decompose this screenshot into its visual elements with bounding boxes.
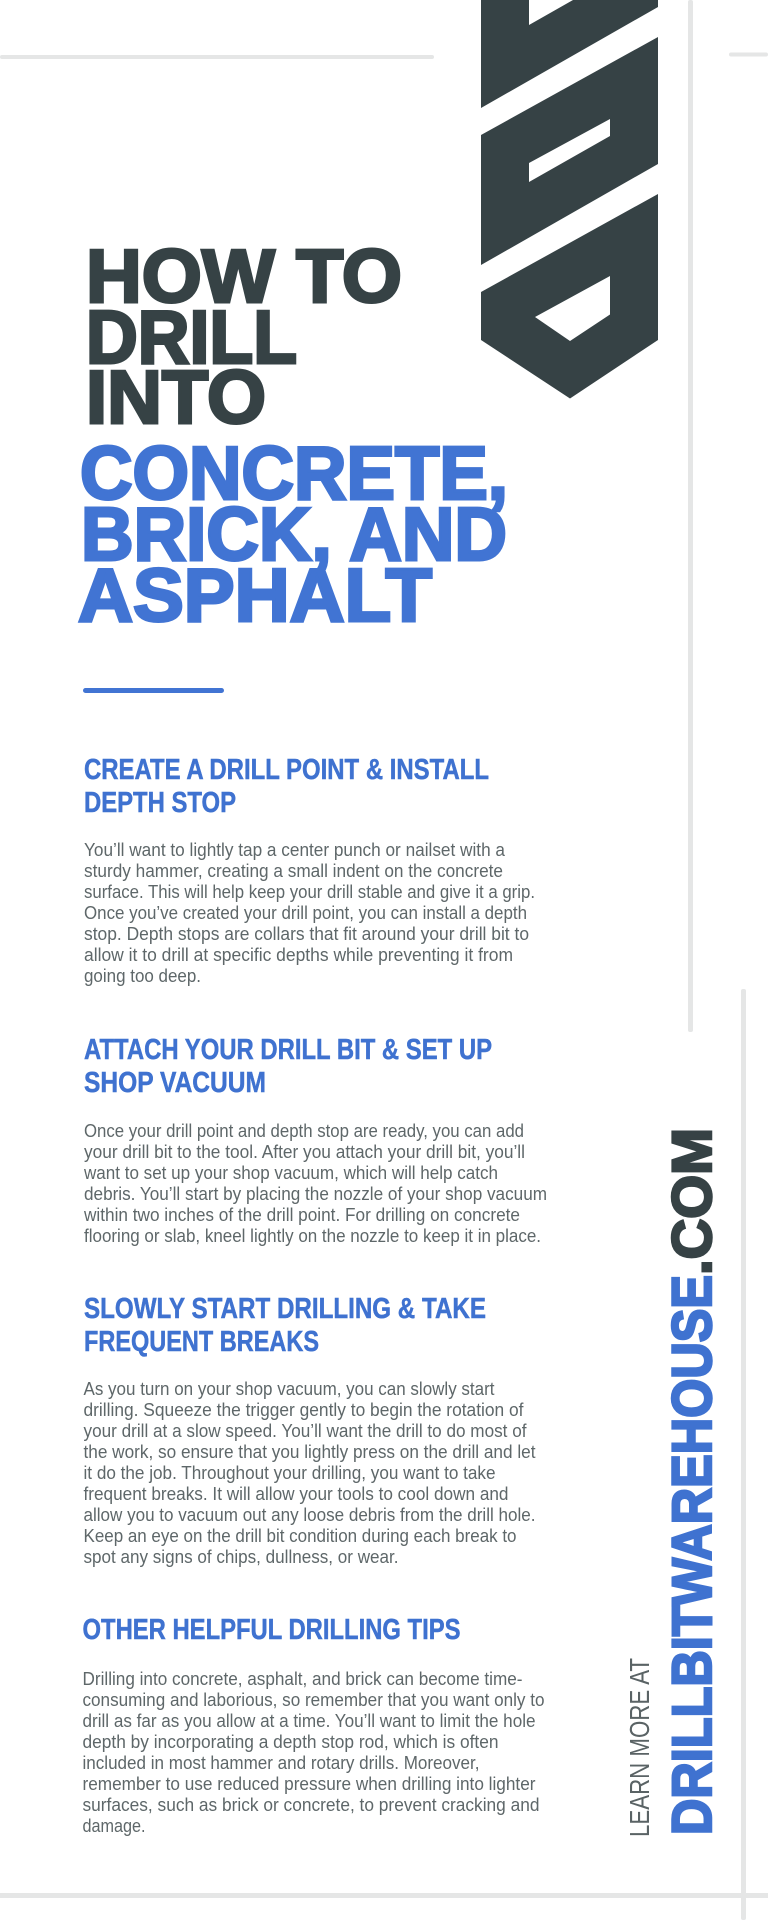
title: blue lines: BRICK, AND bbox=[81, 492, 507, 576]
text block: create a drill point: going too deep. bbox=[84, 966, 201, 986]
text block: other helpful drilling tips: surfaces, such as brick or concrete, to prevent cracking and bbox=[82, 1795, 540, 1815]
panel: other helpful drilling tips bbox=[82, 1614, 544, 1836]
text block: other helpful drilling tips: remember to use reduced pressure when drilling into lighter bbox=[82, 1774, 536, 1794]
text block: slowly start drilling: allow you to vacuum out any loose debris from the drill hole. bbox=[84, 1505, 536, 1525]
title: blue lines: CONCRETE, bbox=[80, 431, 508, 515]
text block: attach your drill bit: debris. You’ll start by placing the nozzle of your shop vacuum bbox=[84, 1184, 547, 1204]
text block: attach your drill bit: flooring or slab, kneel lightly on the nozzle to keep it in place. bbox=[84, 1226, 541, 1246]
text block: other helpful drilling tips: included in most hammer and rotary drills. Moreover, bbox=[82, 1753, 480, 1773]
text block: other helpful drilling tips: Drilling into concrete, asphalt, and brick can become time- bbox=[82, 1669, 523, 1689]
icon: drill bit bbox=[481, 0, 658, 398]
title: dark lines: HOW TO bbox=[86, 234, 402, 318]
text block: other helpful drilling tips bbox=[82, 1669, 544, 1836]
text block: attach your drill bit: within two inches of the drill point. For drilling on concrete bbox=[83, 1205, 520, 1225]
text block: create a drill point: Once you’ve created your drill point, you can install a depth bbox=[84, 903, 527, 923]
heading: slowly start drilling: SLOWLY START DRILLING & TAKE bbox=[84, 1293, 486, 1325]
title underline bbox=[83, 688, 224, 693]
text block: slowly start drilling: frequent breaks. It will allow your tools to cool down and bbox=[84, 1484, 508, 1504]
heading: create a drill point: DEPTH STOP bbox=[84, 787, 236, 819]
text block: slowly start drilling: it do the job. Throughout your drilling, you want to take bbox=[84, 1463, 496, 1483]
heading: attach your drill bit: SHOP VACUUM bbox=[84, 1067, 266, 1099]
heading: attach your drill bit bbox=[84, 1034, 492, 1099]
text block: attach your drill bit bbox=[83, 1121, 547, 1246]
heading: slowly start drilling bbox=[84, 1293, 486, 1358]
panel: attach your drill bit bbox=[83, 1034, 547, 1246]
heading: other helpful drilling tips: OTHER HELPFUL DRILLING TIPS bbox=[82, 1614, 460, 1646]
text block: slowly start drilling: the work, so ensure that you lightly press on the drill and let bbox=[84, 1442, 536, 1462]
text block: other helpful drilling tips: consuming and laborious, so remember that you want only to bbox=[82, 1690, 544, 1710]
text block: slowly start drilling: your drill at a slow speed. You’ll want the drill to do most of bbox=[84, 1421, 527, 1441]
text block: create a drill point: You’ll want to lightly tap a center punch or nailset with a bbox=[84, 840, 506, 860]
text block: other helpful drilling tips: damage. bbox=[82, 1816, 146, 1836]
text block: other helpful drilling tips: drill as far as you allow at a time. You’ll want to limit the hole bbox=[82, 1711, 536, 1731]
heading: create a drill point: CREATE A DRILL POINT & INSTALL bbox=[84, 754, 489, 786]
text block: create a drill point bbox=[84, 840, 535, 986]
text block: create a drill point: stop. Depth stops are collars that fit around your drill bit to bbox=[84, 924, 529, 944]
text: website url: DRILLBITWAREHOUSE bbox=[660, 1275, 723, 1835]
title: dark lines: DRILL bbox=[86, 295, 297, 379]
title: blue lines bbox=[78, 431, 508, 637]
text block: slowly start drilling: spot any signs of chips, dullness, or wear. bbox=[84, 1547, 398, 1567]
text: website url: .COM bbox=[660, 1128, 723, 1275]
text block: attach your drill bit: your drill bit to the tool. After you attach your drill bit, you’ll bbox=[84, 1142, 525, 1162]
text block: attach your drill bit: want to set up your shop vacuum, which will help catch bbox=[83, 1163, 498, 1183]
text block: other helpful drilling tips: depth by incorporating a depth stop rod, which is often bbox=[82, 1732, 498, 1752]
text block: create a drill point: sturdy hammer, creating a small indent on the concrete bbox=[84, 861, 503, 881]
text block: create a drill point: surface. This will help keep your drill stable and give it a grip. bbox=[84, 882, 535, 902]
text block: attach your drill bit: Once your drill point and depth stop are ready, you can add bbox=[84, 1121, 524, 1141]
text block: slowly start drilling: As you turn on your shop vacuum, you can slowly start bbox=[84, 1379, 494, 1399]
heading: create a drill point bbox=[84, 754, 489, 819]
text block: slowly start drilling bbox=[84, 1379, 536, 1567]
text block: create a drill point: allow it to drill at specific depths while preventing it from bbox=[84, 945, 513, 965]
text block: slowly start drilling: drilling. Squeeze the trigger gently to begin the rotation of bbox=[84, 1400, 524, 1420]
heading: slowly start drilling: FREQUENT BREAKS bbox=[84, 1326, 319, 1358]
text: learn more at: LEARN MORE AT bbox=[624, 1658, 655, 1837]
panel: create a drill point bbox=[84, 754, 535, 986]
title bbox=[78, 234, 508, 637]
title: dark lines bbox=[86, 234, 402, 439]
title: dark lines: INTO bbox=[86, 355, 266, 439]
call to action: learn more bbox=[624, 1128, 723, 1837]
heading: attach your drill bit: ATTACH YOUR DRILL BIT & SET UP bbox=[84, 1034, 492, 1066]
panel: slowly start drilling bbox=[84, 1293, 536, 1567]
text block: slowly start drilling: Keep an eye on the drill bit condition during each break to bbox=[84, 1526, 516, 1546]
title: blue lines: ASPHALT bbox=[78, 553, 432, 637]
